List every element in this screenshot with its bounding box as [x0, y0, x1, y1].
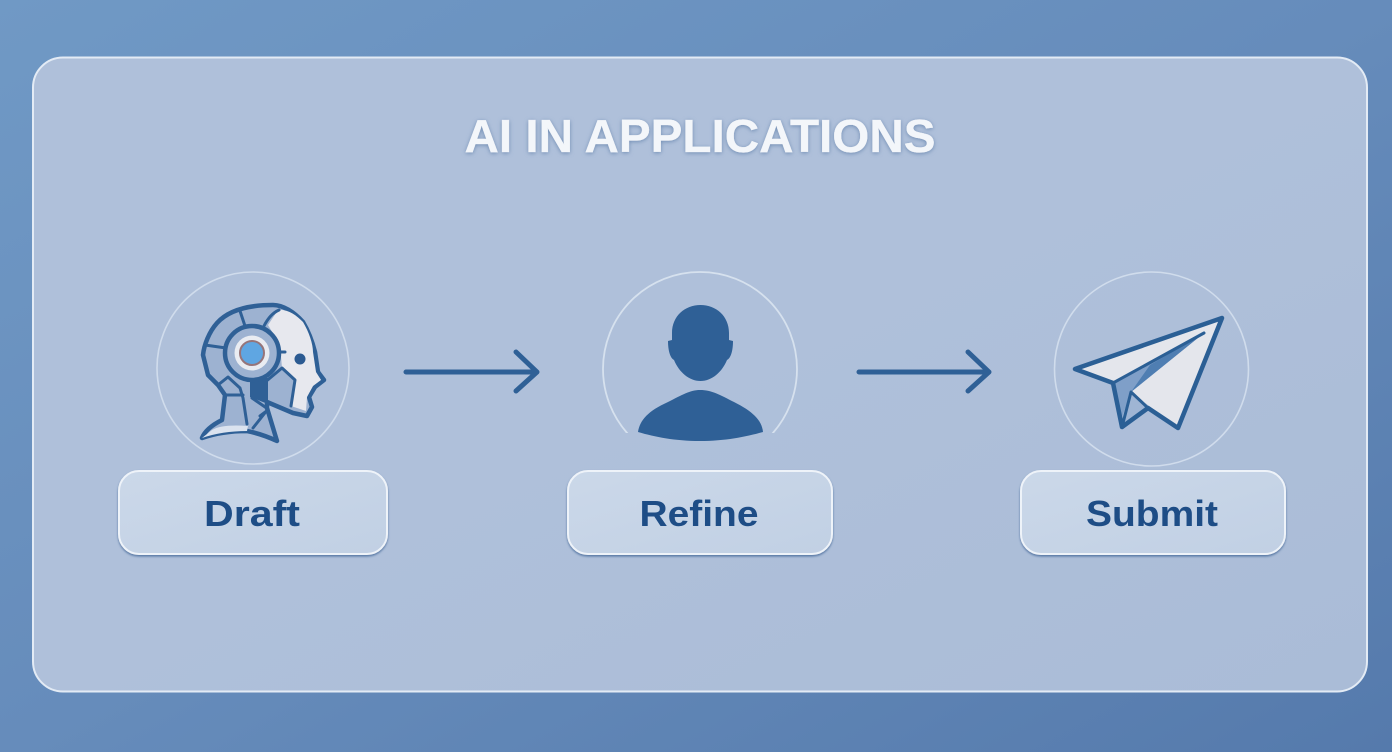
title: AI IN APPLICATIONS [464, 110, 936, 162]
step: Submit [1021, 272, 1285, 554]
icon ring: Refine [602, 271, 798, 433]
icon ring: Submit [1054, 272, 1248, 466]
arrow: Draft to Refine [406, 352, 537, 391]
label button: Submit [1021, 471, 1285, 554]
icon: person silhouette [638, 305, 763, 441]
step: Draft [119, 272, 387, 554]
step: Refine [568, 272, 832, 554]
label button: Submit: Submit [1086, 493, 1218, 534]
icon: paper plane [1075, 318, 1222, 428]
label button: Draft [119, 471, 387, 554]
icon ring: Draft [157, 272, 349, 464]
label button: Draft: Draft [204, 493, 300, 534]
label button: Refine [568, 471, 832, 554]
icon: robot head [202, 305, 324, 441]
label button: Refine: Refine [640, 493, 758, 534]
arrow: Refine to Submit [859, 352, 989, 391]
